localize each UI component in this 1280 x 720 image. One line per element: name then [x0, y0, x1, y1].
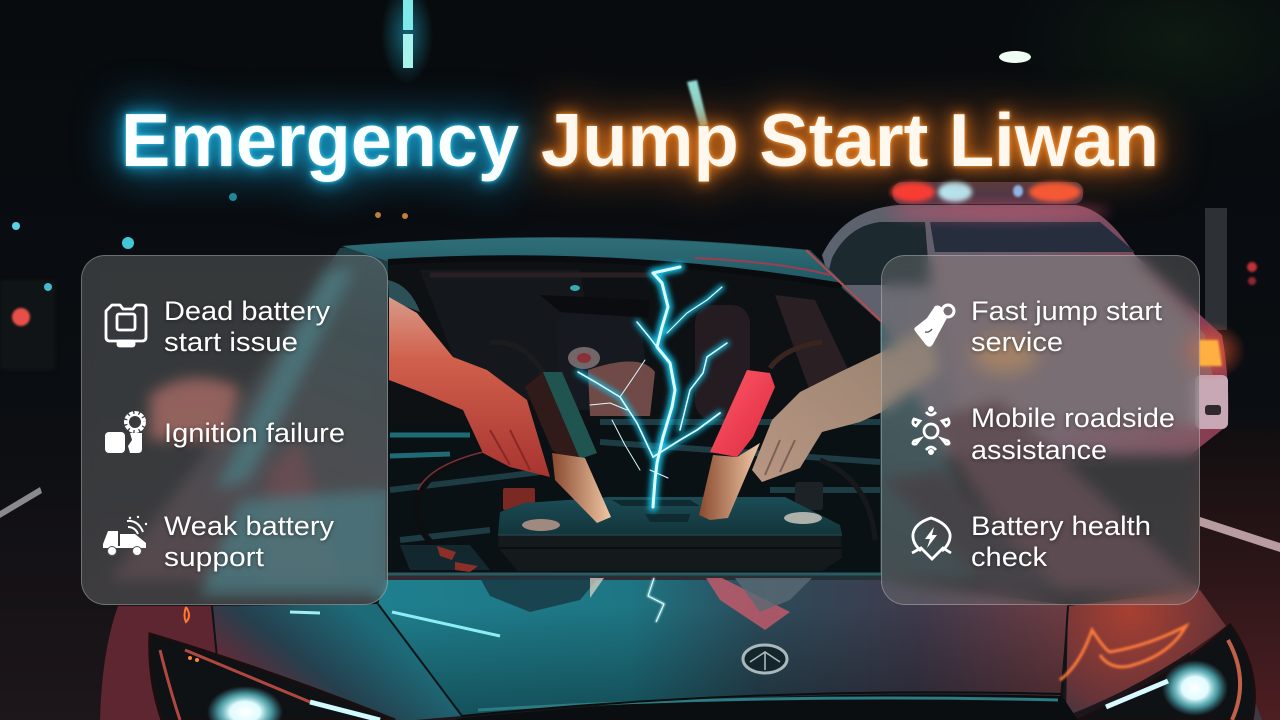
icon: mobile roadside network [913, 407, 949, 454]
engine bay [388, 422, 880, 575]
right arm and hand [752, 325, 940, 482]
label: Battery health check [971, 511, 1151, 572]
label: Battery health check: Battery health [971, 511, 1151, 541]
label: Fast jump start service: Fast jump start [971, 296, 1163, 326]
car side and roof [110, 237, 1200, 595]
label: Weak battery support [164, 511, 335, 572]
hood emblem [743, 645, 787, 673]
label: Fast jump start service [971, 296, 1163, 357]
label: Ignition failure: Ignition failure [164, 418, 345, 448]
label: Mobile roadside assistance: assistance [971, 435, 1107, 465]
car battery [498, 497, 842, 571]
panel: left problems card [81, 255, 388, 605]
police car [822, 182, 1246, 455]
icon: ignition gear [105, 413, 144, 453]
icon: tow truck [103, 516, 147, 556]
front grille [455, 692, 1078, 720]
title: Jump Start Liwan: Jump Start Liwan [541, 98, 1159, 182]
label: Dead battery start issue: Dead battery [164, 296, 331, 326]
label: Weak battery support: support [164, 542, 265, 572]
left headlight [150, 634, 395, 720]
red jumper clamp [699, 342, 822, 520]
lightning arc [578, 267, 727, 507]
title [121, 98, 1159, 182]
panel: right services card [881, 255, 1200, 605]
label: Dead battery start issue [164, 296, 331, 357]
title: Emergency: Emergency [121, 98, 519, 182]
right headlight [1060, 625, 1254, 720]
icon: fast jump clamp [914, 305, 954, 347]
label: Mobile roadside assistance: Mobile roadside [971, 403, 1175, 433]
label: Fast jump start service: service [971, 327, 1063, 357]
black jumper clamp [490, 342, 611, 523]
label: Battery health check: check [971, 542, 1048, 572]
windshield and interior [388, 250, 882, 440]
icon: dead battery [106, 305, 146, 346]
car hood [100, 574, 1262, 720]
label: Dead battery start issue: start issue [164, 327, 298, 357]
label: Weak battery support: Weak battery [164, 511, 335, 541]
icon: battery health shield [912, 518, 951, 559]
street lights [12, 0, 1257, 326]
left arm and hand [388, 280, 550, 477]
label: Mobile roadside assistance [971, 403, 1175, 465]
